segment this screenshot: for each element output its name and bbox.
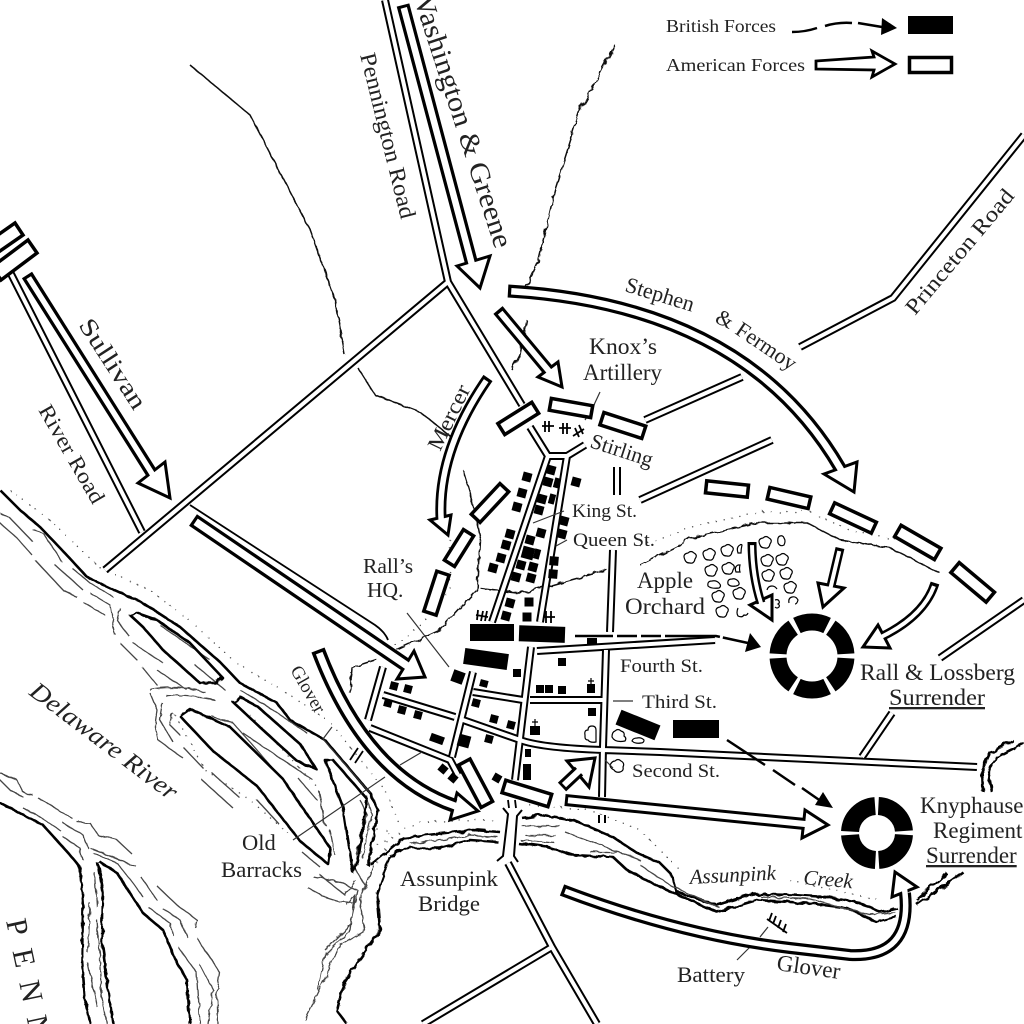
arrow: into town north-east	[562, 758, 595, 787]
legend American block	[910, 58, 952, 72]
far right stream	[982, 740, 1024, 792]
label: Pennington Road: Pennington Road	[355, 50, 421, 222]
legend American label: American Forces	[666, 55, 805, 75]
label: Apple Orchard: Apple	[637, 568, 693, 594]
label: Battery: Battery	[677, 962, 746, 987]
label: Fourth St.: Fourth St.	[620, 657, 703, 677]
lower Delaware east shore	[337, 857, 390, 1024]
arrow: centre to Rall ring	[818, 548, 844, 607]
small road ticks	[350, 748, 516, 808]
north stream	[512, 45, 615, 370]
town trees	[585, 726, 644, 772]
Assunpink Creek lower bank	[390, 840, 897, 922]
arrow: Stephen & Fermoy	[508, 291, 857, 492]
label: Sullivan: Sullivan	[73, 314, 152, 415]
Assunpink Creek upper bank	[370, 815, 897, 912]
arrow: through orchard	[750, 542, 772, 620]
label: Glover west: Glover	[286, 662, 329, 717]
label: River Road: River Road	[34, 400, 110, 508]
leader lines	[293, 392, 768, 960]
British retreat arrow to Rall & Lossberg ring	[575, 633, 761, 652]
channel flow lines south	[150, 688, 365, 903]
label: Assunpink Creek: Creek	[803, 865, 855, 893]
label: Assunpink Creek: Assunpink	[687, 860, 777, 889]
label: Assunpink Creek	[687, 860, 855, 893]
label: Rall & Lossberg Surrender: Surrender	[889, 685, 985, 710]
second line of the east bank near barracks	[356, 795, 372, 858]
lower Pennsylvania shore channels	[0, 803, 190, 1024]
river road upper line	[190, 505, 388, 640]
east bank of the Delaware	[0, 490, 378, 865]
label: Stephen & Fermoy: &	[712, 304, 738, 334]
label: Mercer: Mercer	[422, 380, 476, 454]
river island 2	[233, 697, 317, 770]
label: Stirling: Stirling	[587, 429, 656, 472]
stream stipple	[385, 512, 900, 650]
label: Knyphausen Regiment Surrender: Regiment	[933, 818, 1023, 843]
river island 4	[325, 760, 367, 872]
label: Apple Orchard: Orchard	[625, 594, 705, 620]
arrow: east to Knyphausen	[565, 800, 828, 838]
label: Stephen & Fermoy: Fermoy	[731, 316, 802, 375]
arrow: east to Rall ring	[863, 583, 935, 648]
label: Rall & Lossberg Surrender	[860, 660, 1016, 710]
apple orchard and town trees	[585, 536, 798, 772]
middle stream	[480, 523, 940, 593]
stipple along the creek	[375, 805, 880, 900]
Assunpink bridge	[497, 808, 522, 862]
label: Assunpink Bridge: Assunpink	[400, 866, 499, 891]
label: Delaware River: Delaware River	[23, 677, 183, 806]
Sullivan's column blocks at the map edge	[0, 223, 23, 258]
church crosses	[532, 678, 594, 727]
Delaware River and islands	[0, 490, 1024, 1024]
arrow: Sullivan second leg	[193, 520, 425, 679]
arrow: Glover to bridge	[318, 650, 478, 820]
label: Queen St.: Queen St.	[573, 531, 655, 551]
label: Knox's Artillery: Artillery	[583, 360, 662, 385]
stipple along the east bank	[10, 490, 400, 825]
label: Glover south: Glover	[775, 950, 842, 984]
legend British block	[908, 16, 953, 34]
lower shore flow lines	[305, 865, 373, 1020]
label: Old Barracks	[221, 830, 302, 882]
British retreat arrow to Knyphausen ring	[727, 740, 833, 808]
label: Assunpink Bridge: Bridge	[418, 891, 480, 916]
label: Knyphausen Regiment Surrender	[920, 793, 1024, 868]
legend British arrow	[792, 18, 897, 35]
label: Princeton Road: Princeton Road	[900, 184, 1019, 319]
label: Third St.: Third St.	[642, 693, 717, 713]
label: Knox's Artillery: Knox’s	[589, 334, 657, 359]
label: Rall's HQ: HQ.	[367, 578, 403, 602]
river island 3	[180, 709, 330, 864]
channel flow lines north	[0, 513, 225, 690]
label: Rall & Lossberg Surrender: Rall & Lossberg	[860, 660, 1016, 685]
label: Assunpink Bridge	[400, 866, 499, 916]
legend American arrow	[816, 51, 895, 77]
arrow: Knox's Artillery	[498, 310, 562, 387]
arrow: Mercer	[430, 378, 488, 535]
north-west stream	[190, 65, 455, 440]
label: Rall's HQ	[363, 554, 413, 602]
legend British label: British Forces	[666, 16, 776, 36]
creek east of the arrow	[917, 872, 963, 905]
creek flow lines	[410, 826, 895, 915]
mercer stream to town	[350, 470, 480, 693]
arrow: Washington & Greene	[403, 5, 490, 288]
label: Stephen & Fermoy	[623, 272, 802, 375]
town buildings	[383, 464, 597, 784]
arrow: Glover around creek	[562, 872, 917, 955]
river island 1	[130, 613, 222, 683]
label: Knox's Artillery	[583, 334, 662, 385]
artillery marks	[476, 421, 787, 933]
surrender ring: Knyphausen	[850, 806, 904, 860]
label: Rall's HQ: Rall’s	[363, 554, 413, 578]
lower channel flow lines	[0, 773, 220, 1024]
label: Apple Orchard	[625, 568, 705, 620]
legend	[666, 16, 953, 77]
label: Old Barracks: Old	[242, 830, 276, 855]
label: King St.: King St.	[572, 502, 637, 522]
label: Old Barracks: Barracks	[221, 857, 302, 882]
streams	[190, 45, 940, 693]
label: Knyphausen Regiment Surrender: Surrender	[926, 843, 1017, 868]
arrow: Sullivan	[27, 275, 170, 498]
label: Second St.: Second St.	[632, 762, 720, 782]
label: Stephen & Fermoy: Stephen	[623, 272, 698, 317]
surrender ring: Rall & Lossberg	[778, 622, 846, 690]
British force positions	[463, 624, 719, 740]
American force positions	[0, 223, 994, 807]
